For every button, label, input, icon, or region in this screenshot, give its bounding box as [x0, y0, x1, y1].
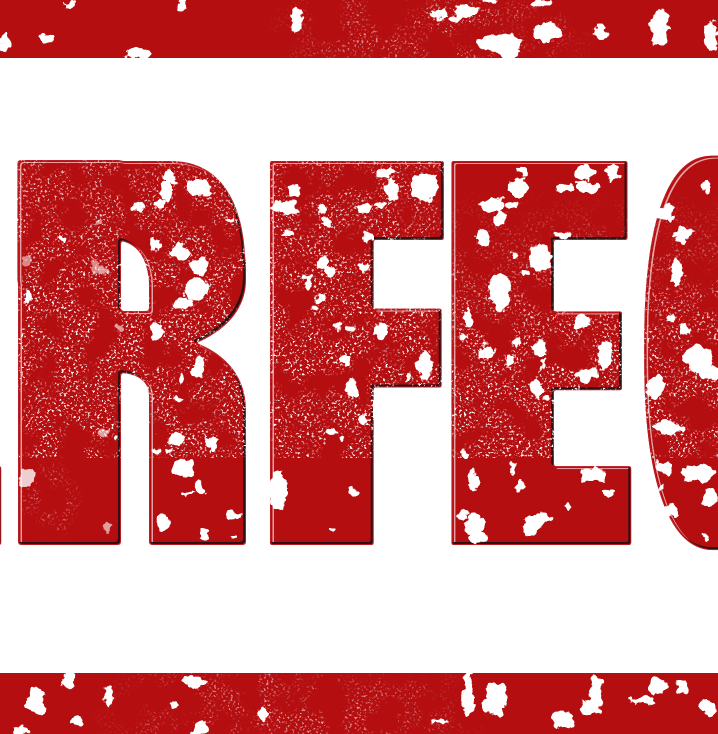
letter R: R	[25, 58, 234, 648]
letter R	[17, 160, 246, 545]
top red band	[0, 0, 718, 58]
blotches: top band	[0, 0, 718, 60]
bottom red band	[0, 673, 718, 734]
fine distressed texture on bands and lower R	[18, 0, 592, 734]
blotches: letter C	[648, 178, 718, 541]
letter E: E	[477, 56, 600, 647]
blotches: bottom band	[14, 672, 718, 734]
word PERFECT cropped	[0, 156, 718, 550]
blotches: letter F	[269, 167, 437, 532]
letter F: F	[295, 58, 413, 648]
letter F middle bar: F	[295, 34, 413, 624]
fine distressed texture on upper letters	[0, 160, 718, 458]
blotches: letter R	[19, 169, 239, 541]
blotches: letter E	[457, 165, 619, 543]
